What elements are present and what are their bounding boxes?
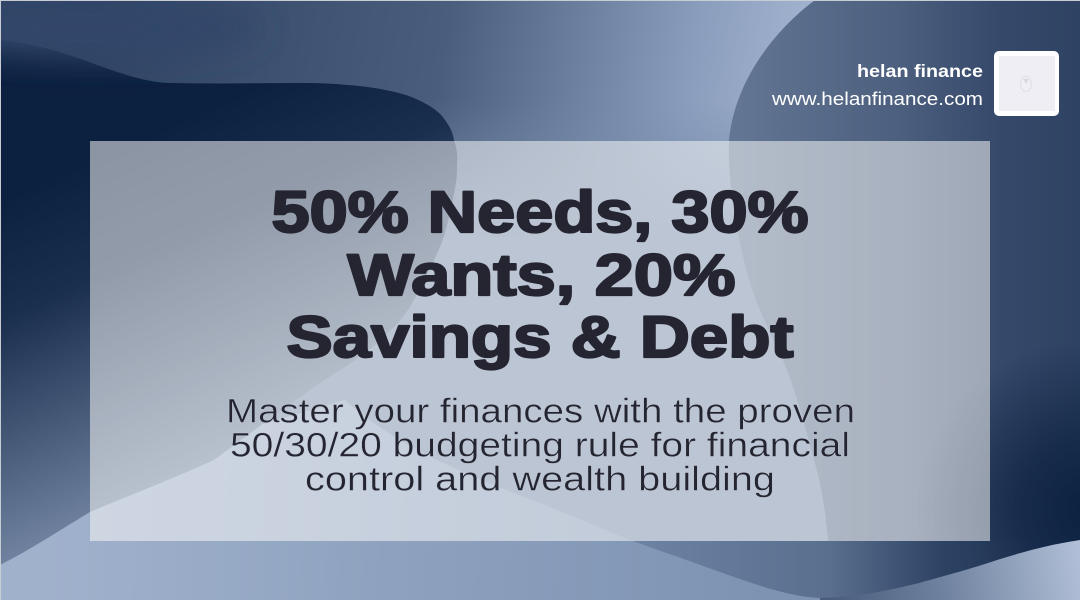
icon: logo tile xyxy=(994,51,1059,116)
brand name and website: www.helanfinance.com xyxy=(771,89,983,109)
subtitle xyxy=(226,392,855,498)
title: Wants, 20% xyxy=(348,243,736,308)
title: Savings & Debt xyxy=(286,305,794,370)
panel: translucent content card xyxy=(90,141,990,541)
subtitle: control and wealth building xyxy=(305,460,775,498)
subtitle: Master your finances with the proven xyxy=(226,392,855,430)
brand name and website xyxy=(771,61,983,109)
brand name and website: helan finance xyxy=(857,61,983,81)
title xyxy=(272,180,808,370)
title: 50% Needs, 30% xyxy=(272,180,808,245)
subtitle: 50/30/20 budgeting rule for financial xyxy=(230,426,850,464)
